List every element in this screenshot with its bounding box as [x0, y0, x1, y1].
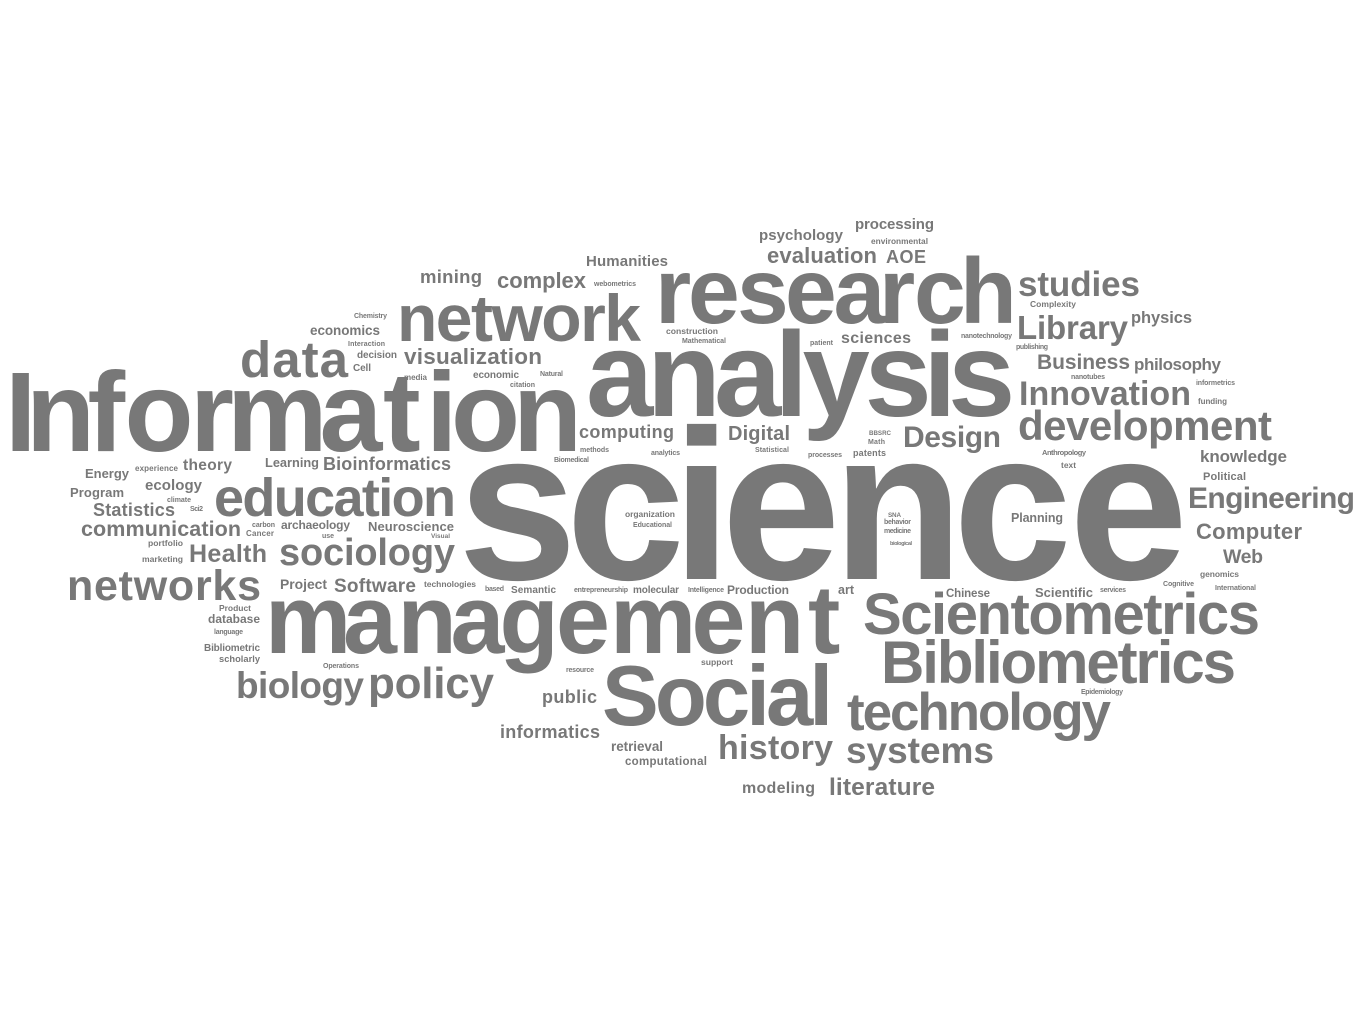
- word: management: management: [265, 565, 840, 674]
- tiny terms: Operations: [323, 663, 359, 670]
- small terms: database: [208, 612, 260, 626]
- small terms: Program: [70, 485, 124, 500]
- word: studies: studies: [1018, 265, 1140, 304]
- tiny terms: text: [1061, 460, 1076, 470]
- medium terms: sciences: [841, 330, 911, 347]
- word: networks: networks: [67, 562, 261, 610]
- word: network: network: [397, 281, 641, 355]
- small terms: Cancer: [246, 529, 274, 538]
- small terms: scholarly: [219, 654, 261, 664]
- medium terms: philosophy: [1134, 355, 1222, 374]
- medium terms: informatics: [500, 722, 600, 742]
- tiny terms: behavior: [884, 519, 911, 526]
- medium terms: psychology: [759, 227, 844, 244]
- tiny terms: climate: [167, 497, 191, 504]
- medium terms: Statistics: [93, 500, 175, 520]
- medium terms: Bioinformatics: [323, 454, 451, 474]
- word: development: development: [1018, 402, 1272, 449]
- small terms: [70, 236, 1246, 768]
- word: education: education: [214, 468, 456, 528]
- small terms: marketing: [142, 554, 183, 564]
- word: analysis: analysis: [586, 306, 1015, 442]
- tiny terms: Visual: [431, 533, 450, 540]
- tiny terms: nanotubes: [1071, 374, 1105, 381]
- word: biology: biology: [236, 665, 364, 706]
- small terms: art: [838, 583, 855, 597]
- small terms: Bibliometric: [204, 643, 260, 654]
- word: Social: Social: [602, 649, 833, 744]
- word: technology: technology: [847, 683, 1112, 742]
- small terms: construction: [666, 326, 718, 336]
- word: Library: Library: [1017, 309, 1129, 346]
- medium terms: evaluation: [767, 243, 877, 268]
- tiny terms: entrepreneurship: [574, 587, 628, 594]
- small terms: Neuroscience: [368, 519, 454, 534]
- small terms: retrieval: [611, 739, 663, 754]
- small terms: molecular: [633, 585, 679, 596]
- medium terms: visualization: [404, 344, 542, 369]
- medium terms: computing: [579, 422, 674, 442]
- tiny terms: Math: [868, 439, 885, 446]
- small terms: Learning: [265, 455, 319, 470]
- small terms: support: [701, 657, 733, 667]
- medium terms: complex: [497, 268, 587, 293]
- tiny terms: Statistical: [755, 447, 789, 454]
- tiny terms: Cognitive: [1163, 581, 1194, 588]
- word: science: science: [458, 386, 1188, 625]
- small terms: economics: [310, 323, 380, 338]
- tiny terms: patient: [810, 340, 834, 347]
- tiny terms: informetrics: [1196, 380, 1235, 387]
- word: Design: Design: [903, 421, 1001, 454]
- small terms: experience: [135, 464, 179, 473]
- tiny terms: language: [214, 629, 243, 636]
- tiny terms: based: [485, 586, 504, 593]
- medium terms: public: [542, 687, 597, 707]
- word: Scientometrics: Scientometrics: [863, 582, 1260, 647]
- medium terms: mining: [420, 266, 482, 287]
- tiny terms: [167, 281, 1256, 696]
- small terms: Planning: [1011, 511, 1063, 525]
- tiny terms: BBSRC: [869, 430, 892, 437]
- tiny terms: funding: [1198, 397, 1227, 406]
- tiny terms: methods: [580, 447, 609, 454]
- medium terms: Digital: [728, 423, 790, 445]
- medium terms: Web: [1223, 546, 1263, 568]
- small terms: media: [404, 373, 428, 382]
- medium terms: knowledge: [1200, 447, 1287, 466]
- medium terms: Computer: [1196, 519, 1302, 544]
- word: Bibliometrics: Bibliometrics: [881, 629, 1236, 696]
- tiny terms: Anthropology: [1042, 448, 1087, 457]
- tiny terms: Biomedical: [554, 457, 589, 464]
- small terms: Energy: [85, 466, 130, 481]
- small terms: organization: [625, 509, 675, 519]
- tiny terms: Chemistry: [354, 313, 387, 320]
- small terms: Complexity: [1030, 299, 1076, 309]
- word: data: data: [240, 331, 349, 388]
- small terms: technologies: [424, 579, 476, 589]
- tiny terms: Natural: [540, 371, 563, 378]
- small terms: economic: [473, 370, 519, 381]
- tiny terms: carbon: [252, 522, 275, 529]
- small terms: Production: [727, 583, 789, 597]
- tiny terms: resource: [566, 667, 594, 674]
- small terms: computational: [625, 756, 707, 768]
- tiny terms: use: [322, 533, 334, 540]
- medium terms: Health: [189, 540, 267, 568]
- tiny terms: medicine: [884, 528, 911, 535]
- medium terms: literature: [829, 774, 935, 801]
- small terms: portfolio: [148, 538, 183, 548]
- small terms: Chinese: [946, 588, 990, 600]
- medium terms: Software: [334, 576, 416, 597]
- medium terms: theory: [183, 457, 232, 474]
- medium terms: Humanities: [586, 253, 668, 270]
- tiny terms: services: [1100, 587, 1126, 594]
- small terms: patents: [853, 448, 886, 458]
- medium terms: processing: [855, 216, 934, 233]
- medium terms: modeling: [742, 780, 815, 797]
- small terms: Project: [280, 576, 327, 592]
- tiny terms: Interaction: [348, 341, 385, 348]
- medium terms: ecology: [145, 477, 203, 494]
- word: Information: Information: [5, 349, 582, 475]
- small terms: Cell: [353, 363, 371, 374]
- small terms: environmental: [871, 236, 928, 246]
- medium terms: Business: [1037, 351, 1130, 374]
- tiny terms: webometrics: [593, 281, 636, 288]
- small terms: Political: [1203, 471, 1246, 483]
- tiny terms: nanotechnology: [961, 333, 1012, 340]
- small terms: genomics: [1200, 569, 1239, 579]
- small terms: archaeology: [281, 518, 350, 532]
- tiny terms: citation: [510, 382, 535, 389]
- tiny terms: International: [1215, 585, 1256, 592]
- medium terms: [81, 216, 1302, 801]
- medium terms: communication: [81, 517, 241, 541]
- word: history: history: [718, 729, 833, 767]
- tiny terms: processes: [808, 452, 842, 459]
- small terms: Product: [219, 603, 251, 613]
- word: policy: policy: [368, 659, 495, 708]
- tiny terms: Educational: [633, 522, 672, 529]
- tiny terms: publishing: [1016, 344, 1048, 351]
- tiny terms: Epidemiology: [1081, 689, 1123, 696]
- tiny terms: Sci2: [190, 506, 203, 513]
- tiny terms: analytics: [651, 450, 680, 457]
- medium terms: physics: [1131, 309, 1192, 327]
- tiny terms: Intelligence: [688, 587, 724, 594]
- word: systems: systems: [846, 730, 994, 771]
- tiny terms: biological: [890, 541, 912, 547]
- word: Innovation: Innovation: [1019, 375, 1191, 413]
- small terms: Semantic: [511, 585, 556, 596]
- small terms: decision: [357, 350, 397, 361]
- word: sociology: sociology: [279, 532, 455, 574]
- word: Engineering: Engineering: [1188, 482, 1355, 515]
- tiny terms: SNA: [888, 512, 901, 519]
- medium terms: AOE: [886, 247, 926, 267]
- tiny terms: Mathematical: [682, 338, 726, 345]
- small terms: Scientific: [1035, 585, 1093, 600]
- word: research: research: [655, 239, 1017, 343]
